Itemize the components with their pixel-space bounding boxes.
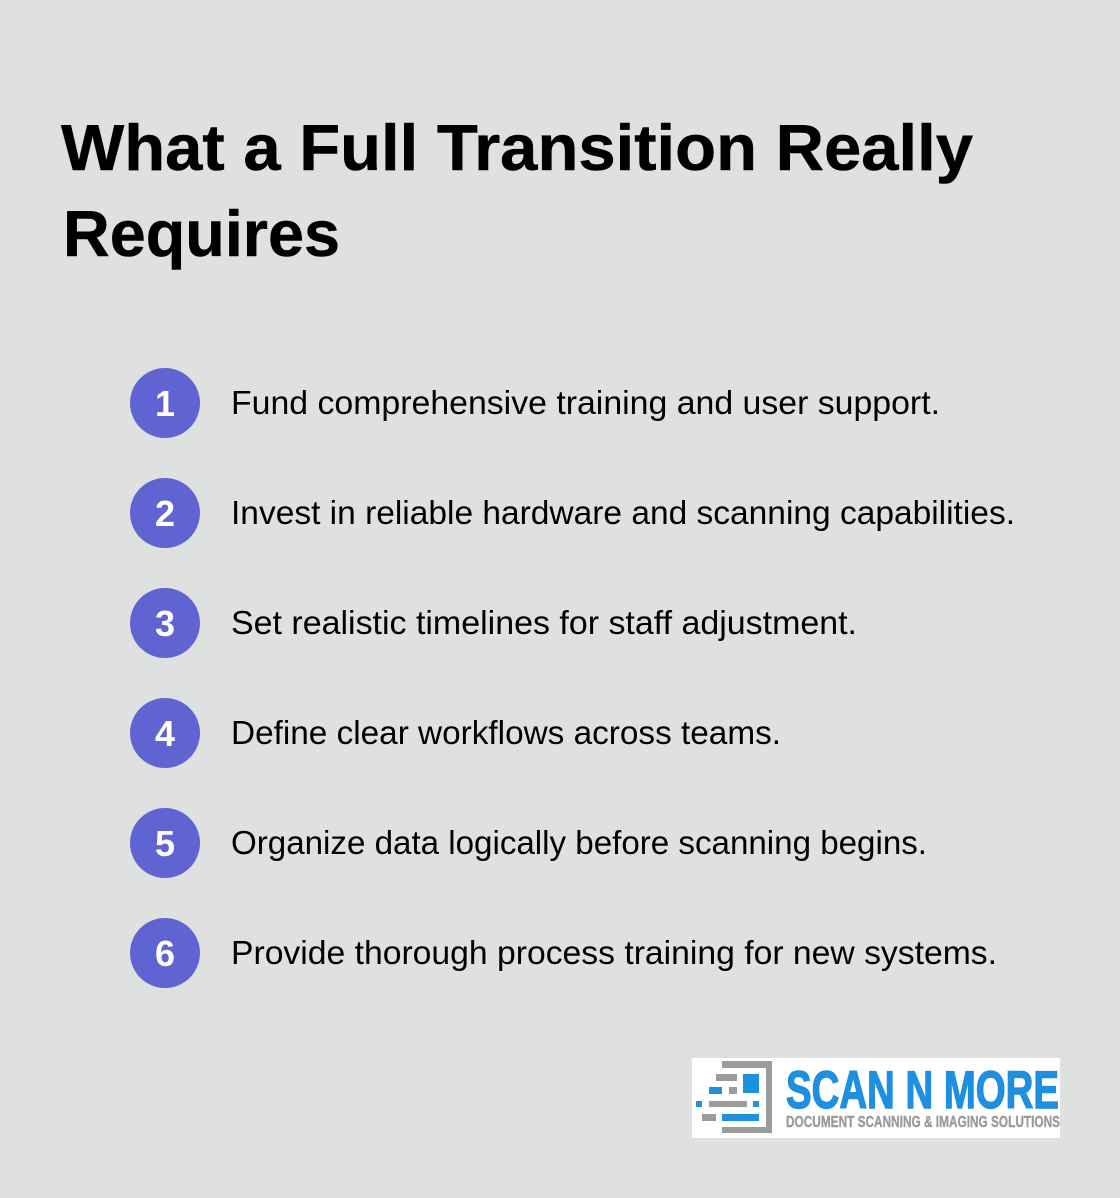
- step 1: [130, 368, 940, 438]
- title: [61, 111, 973, 270]
- step 5: Organize data logically before scanning begins.: [231, 824, 927, 861]
- step 2: 2: [155, 493, 175, 534]
- step 3: [130, 588, 857, 658]
- title: Requires: [63, 197, 340, 270]
- step 4: 4: [155, 713, 175, 754]
- step 2: Invest in reliable hardware and scanning capabilities.: [231, 494, 1015, 531]
- step 3: 3: [155, 603, 175, 644]
- step 5: 5: [155, 823, 175, 864]
- step 6: [130, 918, 997, 988]
- list of steps: [130, 368, 1015, 988]
- step 1: Fund comprehensive training and user support.: [231, 384, 940, 421]
- step 1: 1: [155, 383, 175, 424]
- step 6: 6: [155, 933, 175, 974]
- icon: scanner document: [696, 1061, 772, 1133]
- title: What a Full Transition Really: [61, 111, 973, 184]
- step 4: Define clear workflows across teams.: [231, 714, 781, 751]
- step 2: [130, 478, 1015, 548]
- step 5: [130, 808, 927, 878]
- step 6: Provide thorough process training for new systems.: [231, 934, 997, 971]
- step 3: Set realistic timelines for staff adjustment.: [231, 604, 857, 641]
- logo: Scan N More: [692, 1058, 1060, 1138]
- step 4: [130, 698, 781, 768]
